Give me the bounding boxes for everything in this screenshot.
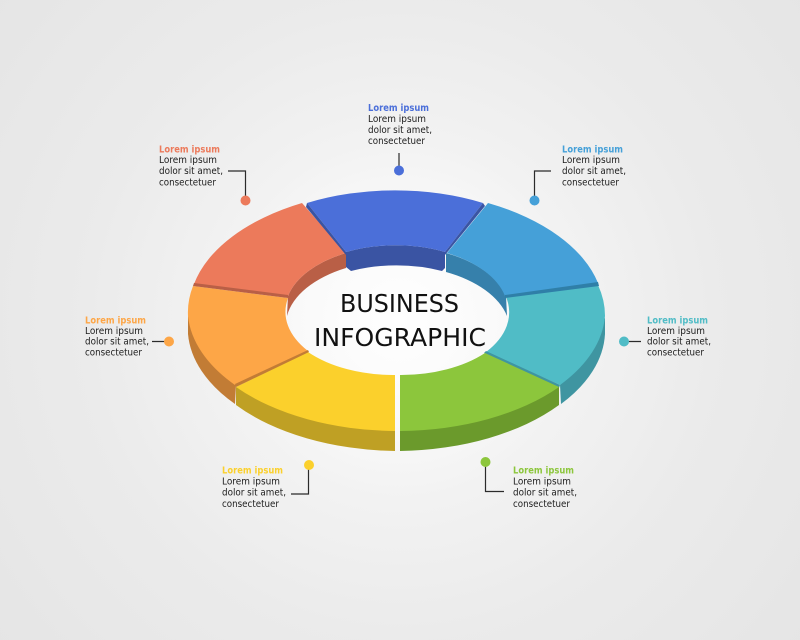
callout: light blue: Lorem ipsum — [562, 155, 620, 166]
callout: yellow: consectetuer — [222, 499, 280, 510]
segment: yellow — [236, 352, 395, 451]
callout: red: dolor sit amet, — [159, 166, 223, 177]
donut chart — [188, 190, 605, 451]
callout: red: Lorem ipsum — [159, 155, 217, 166]
title: INFOGRAPHIC — [314, 323, 486, 352]
callout: teal: consectetuer — [647, 348, 705, 358]
callout: red: consectetuer — [159, 178, 217, 188]
segment: orange — [188, 283, 309, 404]
callout: light blue: Lorem ipsum — [562, 144, 623, 156]
callout: light blue — [530, 144, 626, 206]
callout: yellow: dolor sit amet, — [222, 488, 286, 498]
callout: green: Lorem ipsum — [513, 466, 574, 476]
callout: green: consectetuer — [513, 499, 571, 510]
callout: teal: dolor sit amet, — [647, 336, 711, 348]
segment: green — [400, 353, 559, 451]
callout: orange: Lorem ipsum — [85, 326, 143, 337]
segment: light blue — [446, 203, 598, 316]
segment: teal — [484, 282, 605, 404]
callout: green — [480, 457, 577, 510]
callout: blue: consectetuer — [368, 136, 426, 147]
callout: yellow — [222, 460, 314, 510]
segment: red — [194, 203, 346, 316]
callout: green: dolor sit amet, — [513, 488, 577, 498]
callout: red — [159, 144, 250, 206]
callout: light blue: consectetuer — [562, 178, 620, 188]
callout: yellow: Lorem ipsum — [222, 466, 283, 476]
callout: teal: Lorem ipsum — [647, 326, 705, 337]
callout: green: Lorem ipsum — [513, 476, 571, 488]
callout: orange: consectetuer — [85, 348, 143, 358]
callout: orange: Lorem ipsum — [85, 316, 146, 326]
callout: teal: Lorem ipsum — [647, 316, 708, 326]
segment: blue — [306, 190, 485, 271]
callout: blue — [368, 103, 432, 176]
callout: orange — [85, 316, 174, 358]
title: BUSINESS — [340, 289, 459, 318]
callout: light blue: dolor sit amet, — [562, 166, 626, 177]
title — [314, 289, 486, 352]
callout: red: Lorem ipsum — [159, 144, 220, 156]
callout: blue: Lorem ipsum — [368, 103, 429, 114]
callout: teal — [619, 316, 711, 358]
callout: yellow: Lorem ipsum — [222, 476, 280, 488]
callout: orange: dolor sit amet, — [85, 336, 149, 348]
callout: blue: dolor sit amet, — [368, 125, 432, 136]
callout: blue: Lorem ipsum — [368, 114, 426, 125]
